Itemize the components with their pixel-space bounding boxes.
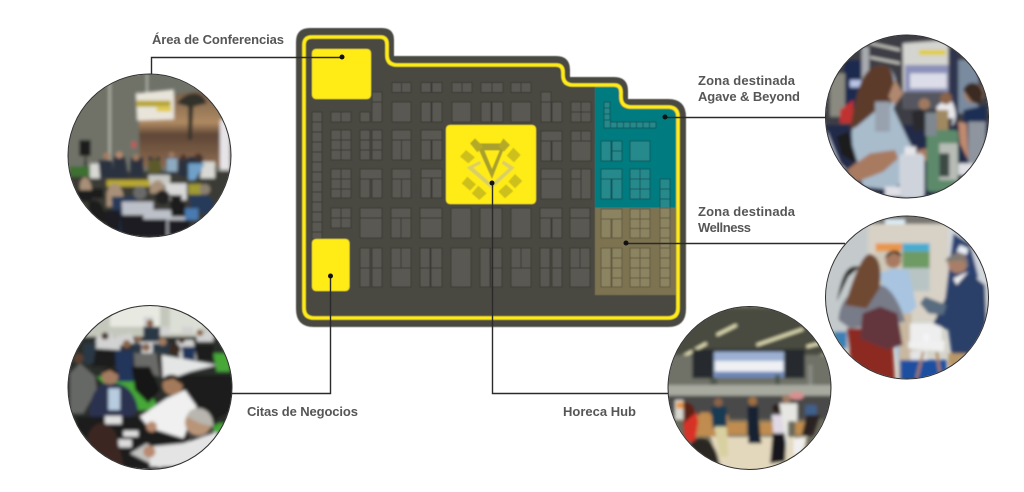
photo ring: Horeca Hub [668, 306, 831, 470]
connector: Wellness [624, 240, 845, 246]
label: Zona destinada Agave & Beyond: Agave & Beyond [698, 89, 800, 104]
tan booths [601, 208, 670, 287]
photo: Horeca Hub [668, 307, 830, 469]
grey booths [312, 82, 591, 287]
label: Zona destinada Wellness: Zona destinada [698, 204, 796, 219]
connector: Agave & Beyond [662, 114, 826, 120]
photo ring: Wellness [826, 216, 988, 379]
zone: Agave & Beyond [595, 80, 680, 208]
photo: Wellness [826, 216, 988, 378]
floor plan [296, 28, 686, 327]
plan outline [296, 28, 686, 327]
teal booths [601, 102, 670, 208]
connector: Área de Conferencias [152, 54, 344, 74]
label: Citas de Negocios: Citas de Negocios [247, 404, 358, 419]
connector: Citas de Negocios [231, 274, 333, 394]
icon: diamond logo [460, 138, 522, 200]
connector: Horeca Hub [490, 180, 668, 394]
photo ring: Agave & Beyond [826, 35, 988, 198]
label: Área de Conferencias: Área de Conferencias [152, 32, 284, 47]
yellow area: Horeca Hub [446, 125, 536, 204]
photo: Citas de Negocios [68, 306, 232, 469]
yellow perimeter line [304, 37, 678, 318]
label: Horeca Hub: Horeca Hub [563, 404, 636, 419]
yellow area: Citas de Negocios [312, 239, 350, 291]
photo ring: Citas de Negocios [68, 306, 232, 470]
zone: Wellness [595, 208, 680, 295]
photo: Área de Conferencias [68, 74, 230, 236]
yellow area: Conferencias [312, 49, 371, 99]
photo: Agave & Beyond [826, 36, 988, 198]
photo ring: Área de Conferencias [68, 74, 231, 237]
label: Zona destinada Wellness: Wellness [698, 220, 751, 235]
label: Zona destinada Agave & Beyond: Zona destinada [698, 73, 796, 88]
